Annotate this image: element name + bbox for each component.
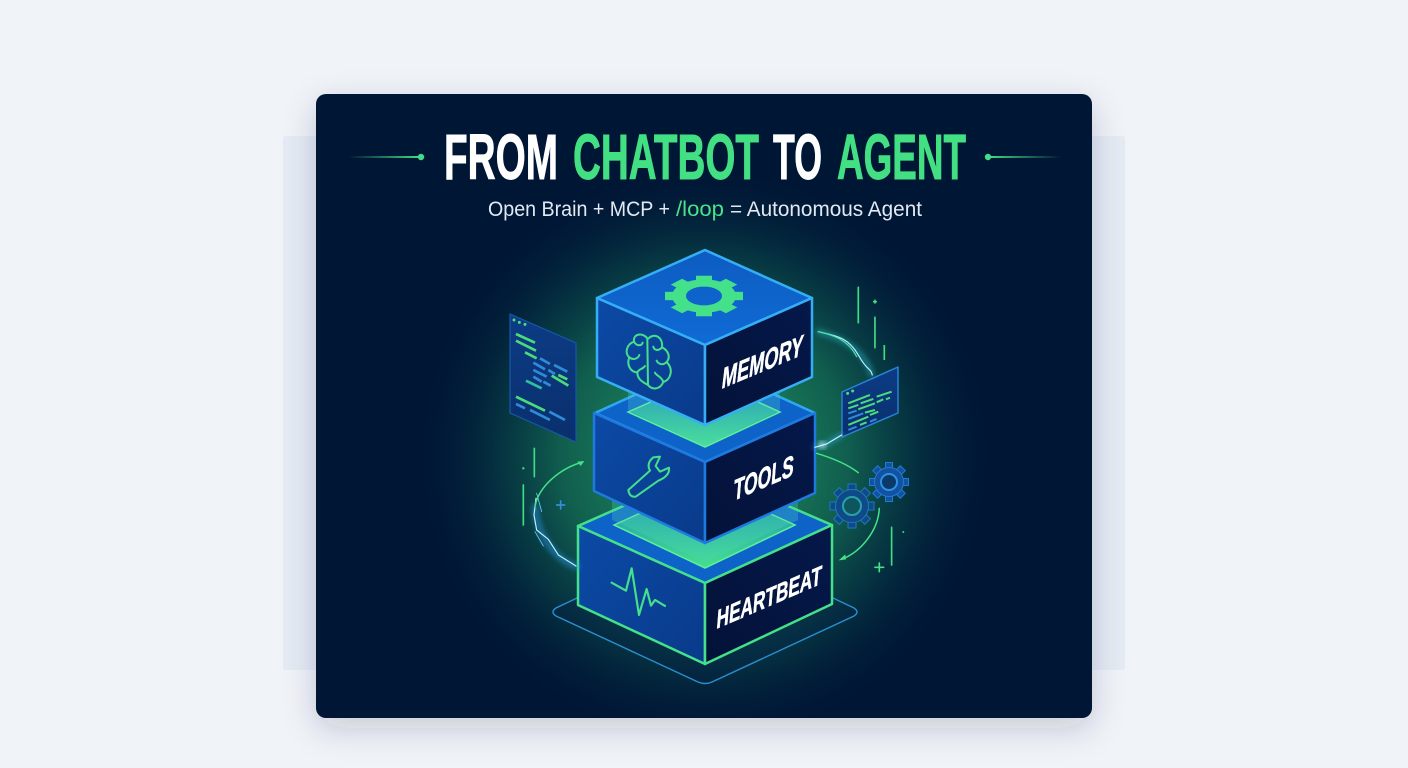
title ornament left — [348, 154, 424, 160]
icon: pulse — [612, 568, 665, 615]
heartbeat left face — [578, 526, 705, 664]
glass column lower — [612, 490, 798, 562]
title: FROM — [444, 121, 558, 193]
tools glowing plate — [628, 378, 780, 447]
icon: gear small — [870, 462, 908, 502]
title: CHATBOT — [573, 121, 759, 193]
subtitle: Open Brain + MCP + — [488, 198, 670, 221]
dark card — [316, 94, 1092, 718]
memory right face — [705, 298, 812, 425]
code panel left — [510, 314, 576, 442]
heartbeat right face — [705, 525, 832, 664]
memory left face — [597, 298, 705, 425]
backdrop panel — [283, 136, 1125, 670]
icon: gear large — [830, 484, 874, 528]
glass column upper — [628, 380, 780, 446]
icon: brain — [627, 335, 671, 388]
tools left face — [594, 413, 705, 543]
code panel right — [842, 367, 898, 437]
block: memory — [597, 250, 812, 425]
title ornament right — [985, 154, 1061, 160]
icon: wrench — [628, 457, 669, 497]
tools right face — [705, 413, 815, 543]
base plate — [553, 598, 857, 684]
title: TO — [773, 121, 822, 193]
energy arc upper right — [815, 332, 872, 448]
sparks upper right — [858, 287, 884, 360]
subtitle: /loop — [676, 198, 724, 221]
central green glow — [458, 208, 952, 702]
icon: gear top — [665, 276, 743, 316]
memory top face — [597, 250, 812, 345]
heartbeat label: HEARTBEAT — [716, 559, 823, 635]
tools top face — [595, 363, 815, 462]
block: heartbeat — [578, 470, 832, 664]
block: tools — [594, 363, 815, 543]
subtitle: = Autonomous Agent — [730, 198, 922, 221]
title: AGENT — [837, 121, 966, 193]
tools label: TOOLS — [732, 448, 795, 508]
heartbeat glowing plate — [614, 484, 795, 568]
memory label: MEMORY — [720, 328, 805, 396]
subtitle — [488, 198, 922, 221]
arrow loop left — [522, 448, 584, 567]
title — [444, 121, 966, 193]
heartbeat top face — [578, 470, 832, 583]
arrow loop right — [817, 453, 904, 572]
